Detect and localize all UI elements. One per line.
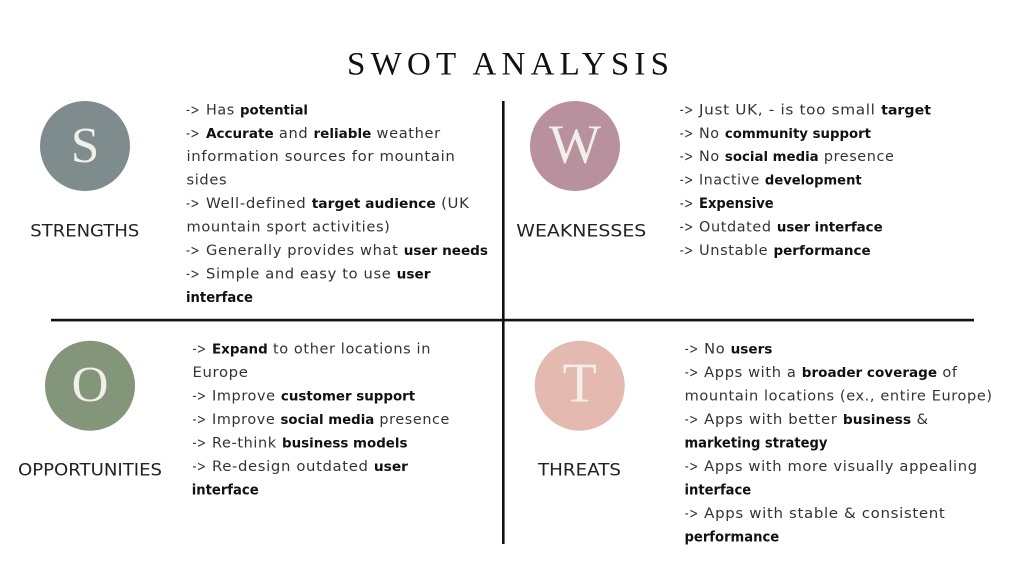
panel: weaknesses [516, 101, 931, 259]
icon: S circle [40, 101, 130, 191]
text block: opportunities list: -> [192, 436, 206, 452]
text block: opportunities list: -> [192, 459, 206, 475]
text block: strengths list: interface [186, 290, 253, 306]
label: opportunities: OPPORTUNITIES [18, 460, 162, 480]
icon: O circle [45, 341, 135, 431]
text block: opportunities list: Expand to other locations in [212, 342, 431, 358]
panel: opportunities [18, 341, 450, 498]
text block: threats list: -> [685, 342, 699, 358]
text block: opportunities list: Re-design outdated user [212, 459, 409, 475]
text block: weaknesses list: -> [680, 243, 694, 259]
text block: opportunities list: Europe [192, 365, 248, 381]
text block: opportunities list: Re-think business models [212, 436, 408, 452]
icon: W circle: W [549, 114, 601, 175]
text block: opportunities list [192, 342, 450, 498]
text block: threats list [684, 342, 993, 545]
text block: threats list: Apps with more visually appealing [704, 459, 978, 475]
icon: W circle [530, 101, 620, 191]
text block: strengths list [186, 102, 488, 306]
text block: weaknesses list: Inactive development [699, 173, 862, 189]
text block: strengths list: Has potential [206, 102, 308, 118]
text block: threats list: -> [685, 412, 699, 428]
text block: weaknesses list: -> [680, 126, 694, 142]
text block: weaknesses list [680, 102, 931, 259]
panel: threats [535, 341, 993, 545]
text block: weaknesses list: -> [680, 220, 694, 236]
text block: strengths list: -> [186, 196, 200, 212]
text block: strengths list: -> [186, 243, 200, 259]
text block: strengths list: Well-defined target audience (UK [206, 196, 470, 212]
text block: threats list: -> [685, 506, 699, 522]
text block: weaknesses list: -> [680, 196, 694, 212]
text block: threats list: Apps with a broader coverage of [704, 365, 958, 381]
text block: strengths list: -> [186, 102, 200, 118]
text block: opportunities list: interface [192, 482, 259, 498]
text block: weaknesses list: -> [680, 173, 694, 189]
text block: weaknesses list: Outdated user interface [699, 220, 883, 236]
text block: threats list: -> [685, 365, 699, 381]
text block: threats list: interface [684, 482, 751, 498]
text block: weaknesses list: Expensive [699, 196, 774, 212]
text block: weaknesses list: No social media presence [699, 149, 894, 165]
text block: strengths list: information sources for mountain [186, 149, 456, 165]
text block: strengths list: mountain sport activities) [186, 220, 390, 236]
text block: weaknesses list: Just UK, - is too small target [698, 102, 931, 118]
panel: strengths [30, 101, 488, 306]
text block: threats list: mountain locations (ex., entire Europe) [685, 389, 993, 405]
label: strengths: STRENGTHS [30, 221, 139, 241]
text block: threats list: Apps with better business & [704, 412, 929, 428]
text block: threats list: -> [685, 459, 699, 475]
text block: threats list: performance [684, 529, 779, 545]
text block: opportunities list: Improve customer support [212, 389, 415, 405]
text block: strengths list: -> [186, 267, 200, 283]
title: SWOT ANALYSIS [347, 46, 669, 82]
text block: strengths list: Accurate and reliable weather [206, 126, 441, 142]
text block: threats list: Apps with stable & consistent [704, 506, 945, 522]
vertical divider [502, 101, 505, 544]
horizontal divider [51, 319, 974, 321]
icon: T circle: T [563, 353, 597, 415]
label: weaknesses: WEAKNESSES [516, 221, 646, 241]
text block: strengths list: sides [186, 173, 227, 189]
text block: opportunities list: Improve social media presence [212, 412, 450, 428]
text block: strengths list: Generally provides what user needs [206, 243, 488, 259]
icon: T circle [535, 341, 625, 431]
text block: threats list: No users [704, 342, 773, 358]
text block: strengths list: -> [186, 126, 200, 142]
text block: strengths list: Simple and easy to use user [206, 267, 431, 283]
text block: weaknesses list: No community support [699, 126, 871, 142]
text block: weaknesses list: -> [680, 149, 694, 165]
text block: weaknesses list: -> [680, 102, 694, 118]
label: threats: THREATS [537, 460, 621, 480]
text block: opportunities list: -> [192, 342, 206, 358]
text block: weaknesses list: Unstable performance [699, 243, 871, 259]
text block: threats list: marketing strategy [684, 436, 828, 452]
icon: S circle: S [71, 119, 99, 175]
icon: O circle: O [72, 358, 108, 414]
text block: opportunities list: -> [192, 412, 206, 428]
text block: opportunities list: -> [192, 389, 206, 405]
